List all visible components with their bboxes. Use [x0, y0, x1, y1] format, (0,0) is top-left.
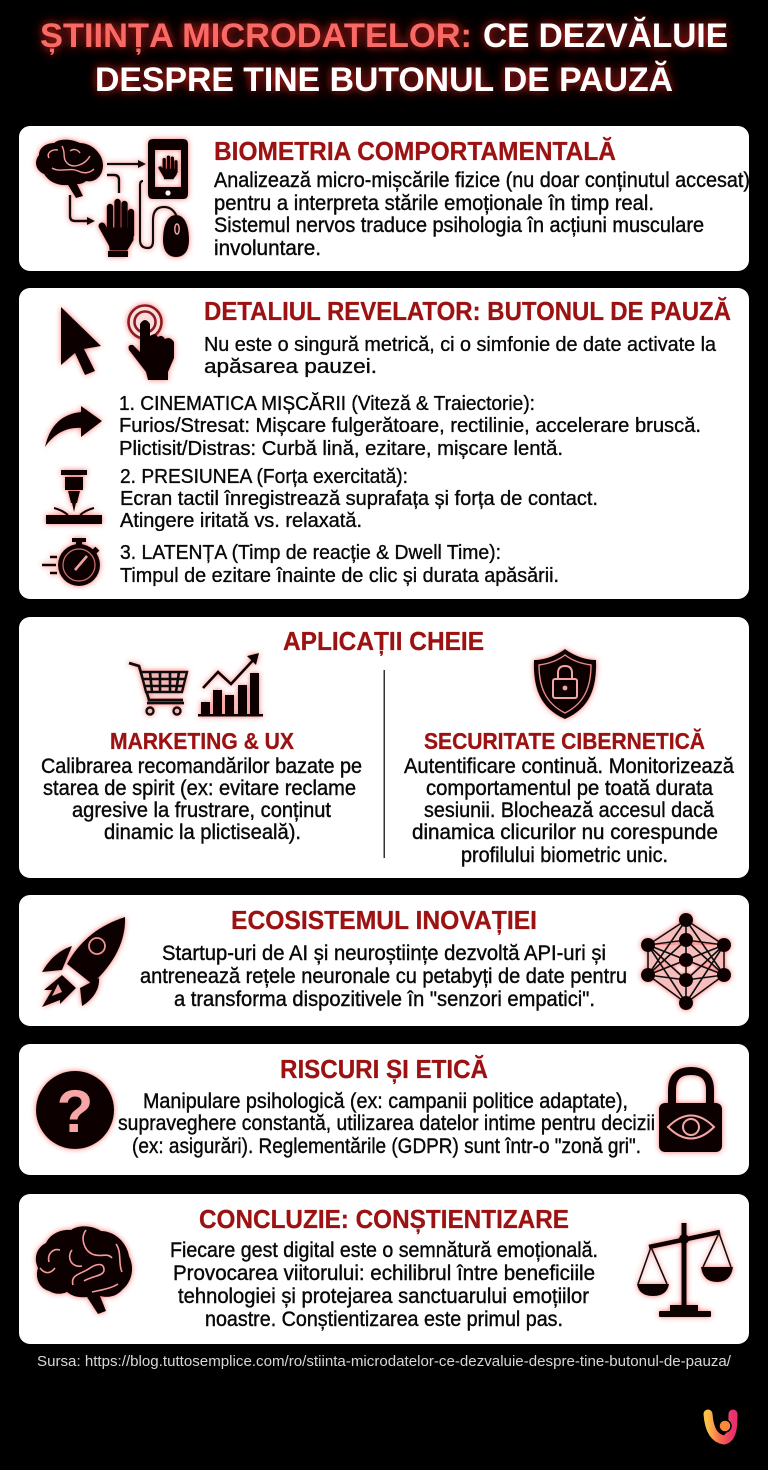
- text block: involuntare.: [214, 237, 321, 260]
- panel: aplicații cheie: [19, 617, 749, 878]
- text block: Fiecare gest digital este o semnătură emoțională.: [170, 1239, 598, 1262]
- column: marketing & ux: [41, 728, 362, 844]
- icon: tapping hand: [128, 306, 174, 380]
- panel: concluzie: [19, 1194, 749, 1344]
- text: presiunea: 2. PRESIUNEA (Forța exercitată):: [120, 466, 408, 488]
- icon: logo: [708, 1414, 733, 1440]
- icon: question mark: ?: [57, 1078, 93, 1145]
- panel: biometria comportamentală: [19, 126, 750, 271]
- icon: neural network: [641, 913, 731, 1010]
- icon: balance scale: [637, 1223, 733, 1317]
- text block: noastre. Conștientizarea este primul pas.: [205, 1308, 563, 1331]
- column: securitate cibernetică: dinamica clicurilor nu corespunde: [412, 821, 718, 844]
- text: presiunea: Ecran tactil înregistrează suprafața și forța de contact.: [120, 488, 598, 510]
- column: securitate cibernetică: comportamentul pe toată durata: [426, 777, 713, 800]
- column: securitate cibernetică: SECURITATE CIBERNETICĂ: [424, 727, 705, 754]
- heading: APLICAȚII CHEIE: [283, 626, 484, 656]
- text block: Startup-uri de AI și neuroștiințe dezvoltă API-uri și: [162, 942, 606, 965]
- column: marketing & ux: agresive la frustrare, conținut: [72, 799, 331, 822]
- title: ȘTIINȚA MICRODATELOR:: [40, 17, 472, 55]
- panel: riscuri și etică: [19, 1044, 749, 1175]
- icon: shopping cart: [129, 663, 187, 714]
- column: securitate cibernetică: [404, 727, 734, 867]
- text block: [170, 1239, 598, 1331]
- text block: Analizează micro-mișcările fizice (nu doar conținutul accesat): [214, 169, 750, 192]
- text block: (ex: asigurări). Reglementările (GDPR) sunt într-o "zonă gri".: [132, 1135, 641, 1158]
- text: cinematica mișcării: Furios/Stresat: Mișcare fulgerătoare, rectilinie, accelerare bruscă.: [119, 415, 701, 437]
- text block: [118, 1090, 655, 1158]
- text block: [140, 942, 627, 1011]
- title: [40, 17, 728, 99]
- column: securitate cibernetică: Autentificare continuă. Monitorizează: [404, 755, 734, 778]
- icon: cursor arrow: [61, 307, 101, 375]
- text: cinematica mișcării: [119, 392, 701, 460]
- text: presiunea: Atingere iritată vs. relaxată.: [120, 510, 362, 532]
- title: DESPRE TINE BUTONUL DE PAUZĂ: [95, 61, 673, 99]
- text: presiunea: [120, 466, 598, 532]
- column: securitate cibernetică: profilului biometric unic.: [461, 844, 668, 867]
- panel: ecosistemul inovației: [19, 895, 749, 1026]
- text: latența: Timpul de ezitare înainte de clic și durata apăsării.: [120, 565, 559, 587]
- text: cinematica mișcării: Plictisit/Distras: Curbă lină, ezitare, mișcare lentă.: [119, 438, 563, 460]
- source line: Sursa: https://blog.tuttosemplice.com/ro/stiinta-microdatelor-ce-dezvaluie-despre-tine-butonul-de-pauza/: [37, 1353, 732, 1370]
- icon: shield with lock: [534, 649, 596, 719]
- text: latența: [120, 542, 559, 587]
- intro text: Nu este o singură metrică, ci o simfonie de date activate la: [204, 334, 717, 356]
- icon: curved arrow: [45, 406, 102, 447]
- icon: growth chart: [198, 653, 263, 716]
- text: cinematica mișcării: 1. CINEMATICA MIȘCĂRII (Viteză & Traiectorie):: [119, 392, 535, 415]
- text block: tehnologiei și protejarea sanctuarului emoțiilor: [178, 1285, 589, 1308]
- intro text: [204, 334, 717, 378]
- text block: supraveghere constantă, utilizarea datelor intime pentru decizii: [118, 1112, 655, 1135]
- text block: a transforma dispozitivele în "senzori empatici".: [174, 988, 595, 1011]
- column: marketing & ux: dinamic la plictiseală).: [104, 821, 301, 844]
- panel: detaliul revelator: [19, 288, 749, 599]
- text: latența: 3. LATENȚA (Timp de reacție & Dwell Time):: [120, 542, 501, 564]
- text block: Provocarea viitorului: echilibrul între beneficiile: [173, 1262, 595, 1285]
- heading: BIOMETRIA COMPORTAMENTALĂ: [214, 136, 616, 166]
- heading: ECOSISTEMUL INOVAȚIEI: [231, 905, 537, 935]
- heading: CONCLUZIE: CONȘTIENTIZARE: [199, 1204, 569, 1234]
- icon: question mark: [36, 1071, 114, 1149]
- text block: antrenează rețele neuronale cu petabyți de date pentru: [140, 965, 627, 988]
- intro text: apăsarea pauzei.: [204, 356, 377, 378]
- column: securitate cibernetică: sesiunii. Blochează accesul dacă: [424, 799, 714, 822]
- icon: stopwatch: [42, 538, 100, 586]
- icon: pressure press: [46, 470, 102, 524]
- small hand on phone screen: [160, 157, 177, 179]
- text block: Manipulare psihologică (ex: campanii politice adaptate),: [143, 1090, 628, 1113]
- title: CE DEZVĂLUIE: [483, 17, 728, 55]
- heading: DETALIUL REVELATOR: BUTONUL DE PAUZĂ: [204, 296, 731, 326]
- column: marketing & ux: starea de spirit (ex: evitare reclame: [43, 777, 356, 800]
- divider: [384, 670, 385, 858]
- icon: rocket: [42, 917, 125, 1007]
- heading: RISCURI ȘI ETICĂ: [280, 1054, 488, 1084]
- column: marketing & ux: Calibrarea recomandărilor bazate pe: [41, 755, 362, 778]
- column: marketing & ux: MARKETING & UX: [110, 728, 295, 754]
- text block: Sistemul nervos traduce psihologia în acțiuni musculare: [214, 214, 704, 237]
- text block: pentru a interpreta stările emoționale în timp real.: [214, 192, 654, 215]
- large hand: [102, 202, 133, 257]
- text block: [214, 169, 750, 260]
- icon: brain: [36, 1226, 132, 1314]
- icon: brain, phone, hand and mouse diagram: [36, 139, 189, 257]
- icon: padlock with eye: [659, 1071, 722, 1152]
